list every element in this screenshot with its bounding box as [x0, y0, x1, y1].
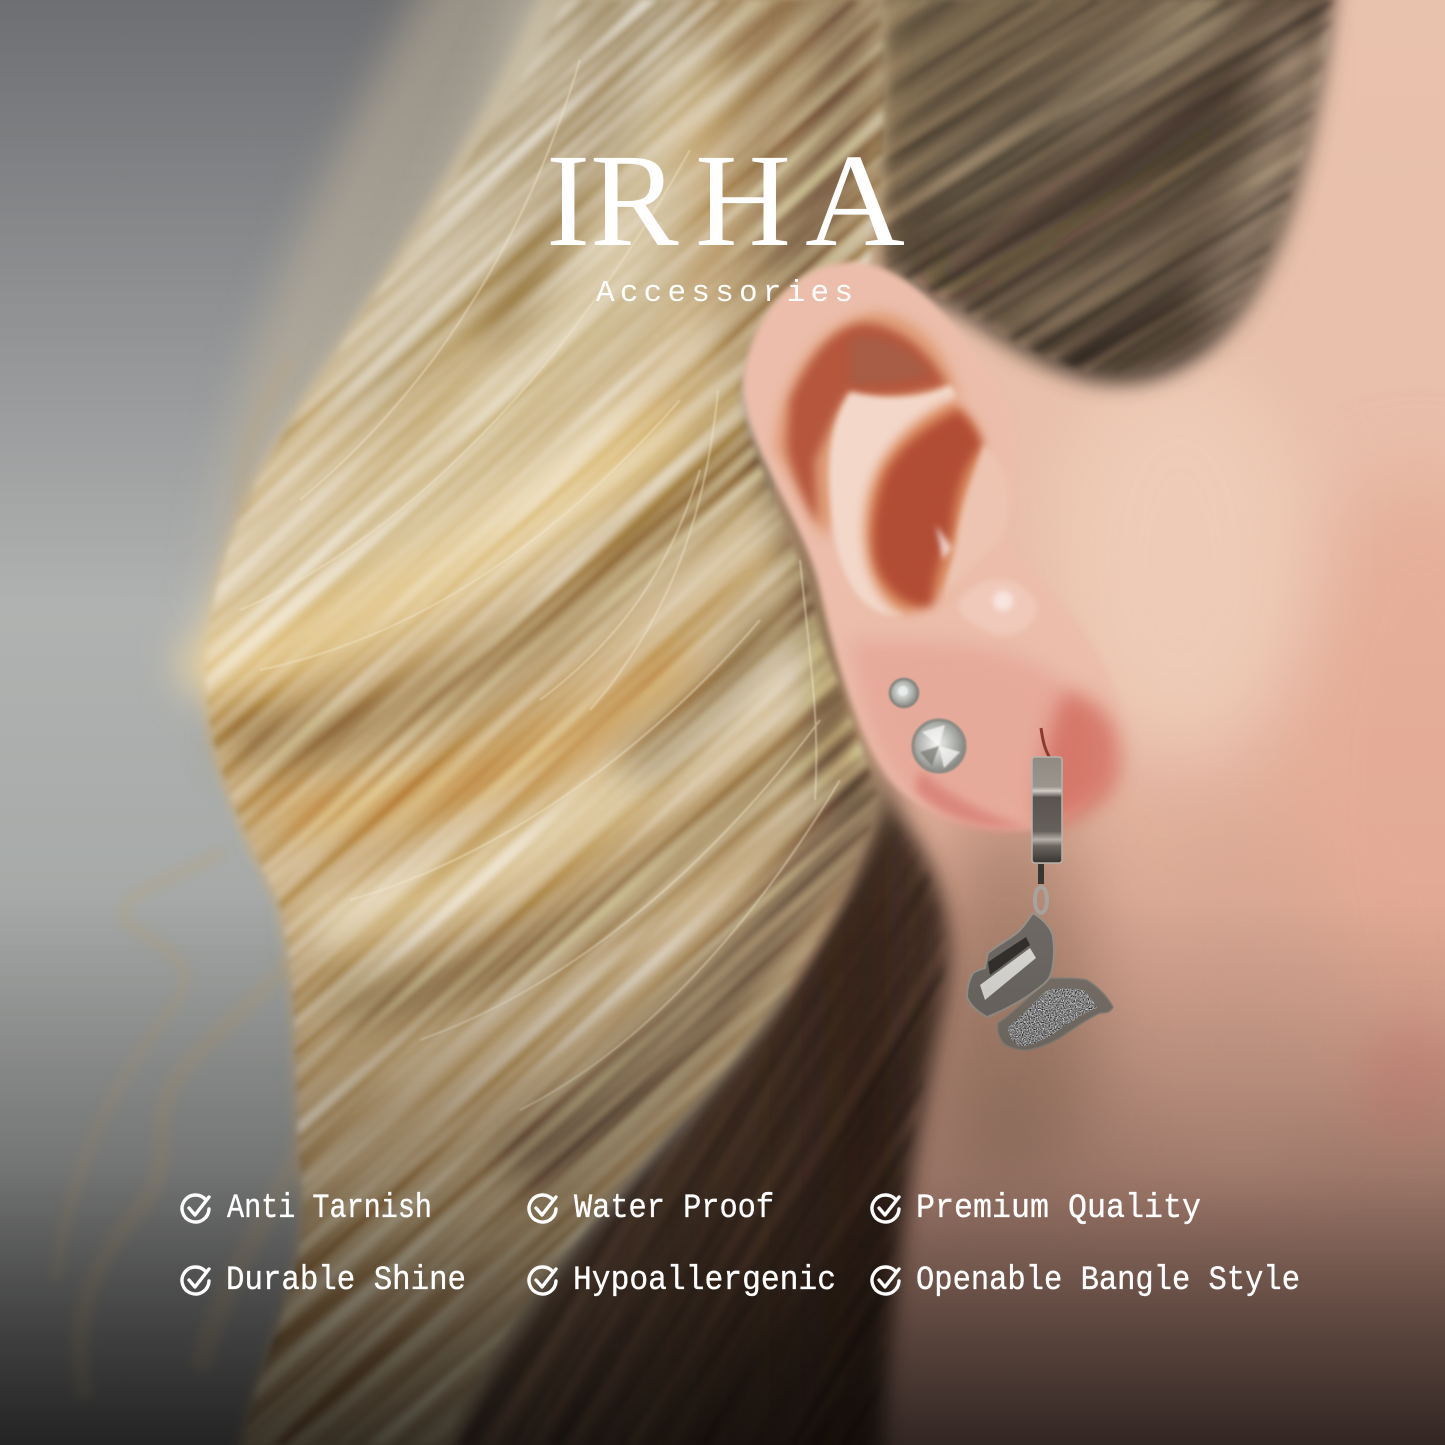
earring: connector ring: [1038, 864, 1044, 884]
title: A: [805, 126, 905, 274]
ear: tragus: [959, 579, 1037, 635]
photo: main blonde hair: [203, 0, 885, 1445]
feature: Premium Quality: Premium Quality: [916, 1190, 1201, 1228]
ear: lobe redness: [1035, 690, 1120, 828]
photo: brown hair above the ear: [800, 0, 1340, 384]
subtitle: Accessories: [596, 276, 853, 311]
title: [546, 126, 905, 274]
photo: fine hair strands: [240, 60, 840, 1110]
ear: outer shape: [743, 262, 1123, 830]
feature: Anti Tarnish: Anti Tarnish: [227, 1190, 432, 1228]
ear: lobe piercing slit: [1041, 728, 1050, 758]
earring: small stud: [890, 679, 918, 707]
earring: butterfly upper wing: [967, 913, 1054, 1017]
photo: hair shadows: [250, 0, 870, 1160]
ear: concha glint: [936, 525, 952, 560]
ear: concha glow: [865, 400, 982, 612]
ear: concha: [873, 410, 982, 606]
ear: lobe tint: [850, 640, 1084, 823]
earring: butterfly dark facet: [988, 937, 1030, 975]
ear: upper cavity brown: [850, 337, 930, 385]
photo: hair strand texture: [206, 0, 884, 1445]
earring: butterfly highlight: [980, 948, 1036, 1000]
ear: tragus glint: [993, 591, 1013, 611]
earring: butterfly glitter: [1008, 988, 1097, 1047]
title: IRH: [546, 126, 791, 274]
earring: large stud: [913, 720, 965, 772]
photo: blonde hair mass: [55, 0, 885, 1445]
photo: dark hair under the ear: [420, 790, 950, 1445]
feature list: [182, 1190, 1300, 1300]
photo: wispy hair at left: [55, 360, 310, 1400]
earring: butterfly lower wing: [998, 978, 1113, 1050]
ear: [743, 262, 1123, 830]
ear: upper cavity glow: [775, 312, 958, 540]
feature: Openable Bangle Style: Openable Bangle Style: [916, 1262, 1300, 1300]
photo: neck and cheek skin: [760, 0, 1445, 1445]
photo: warm brown wash at top of hair: [679, 0, 885, 390]
bottom dark overlay: [0, 900, 1445, 1445]
ear: antihelix highlight: [829, 385, 955, 616]
earring: hoop: [1032, 757, 1062, 863]
feature: Durable Shine: Durable Shine: [226, 1262, 466, 1300]
earring: hoop and butterfly charm: [967, 757, 1113, 1050]
photo: soft translucent hair edge: [205, 0, 620, 600]
ear: upper cavity: [787, 323, 947, 525]
photo: hair highlights: [215, 10, 830, 1075]
feature: Water Proof: Water Proof: [574, 1190, 774, 1228]
feature: Hypoallergenic: Hypoallergenic: [573, 1262, 836, 1300]
ear: skin fold beside concha: [945, 445, 1009, 600]
ear: lobe lower edge: [915, 770, 1035, 830]
